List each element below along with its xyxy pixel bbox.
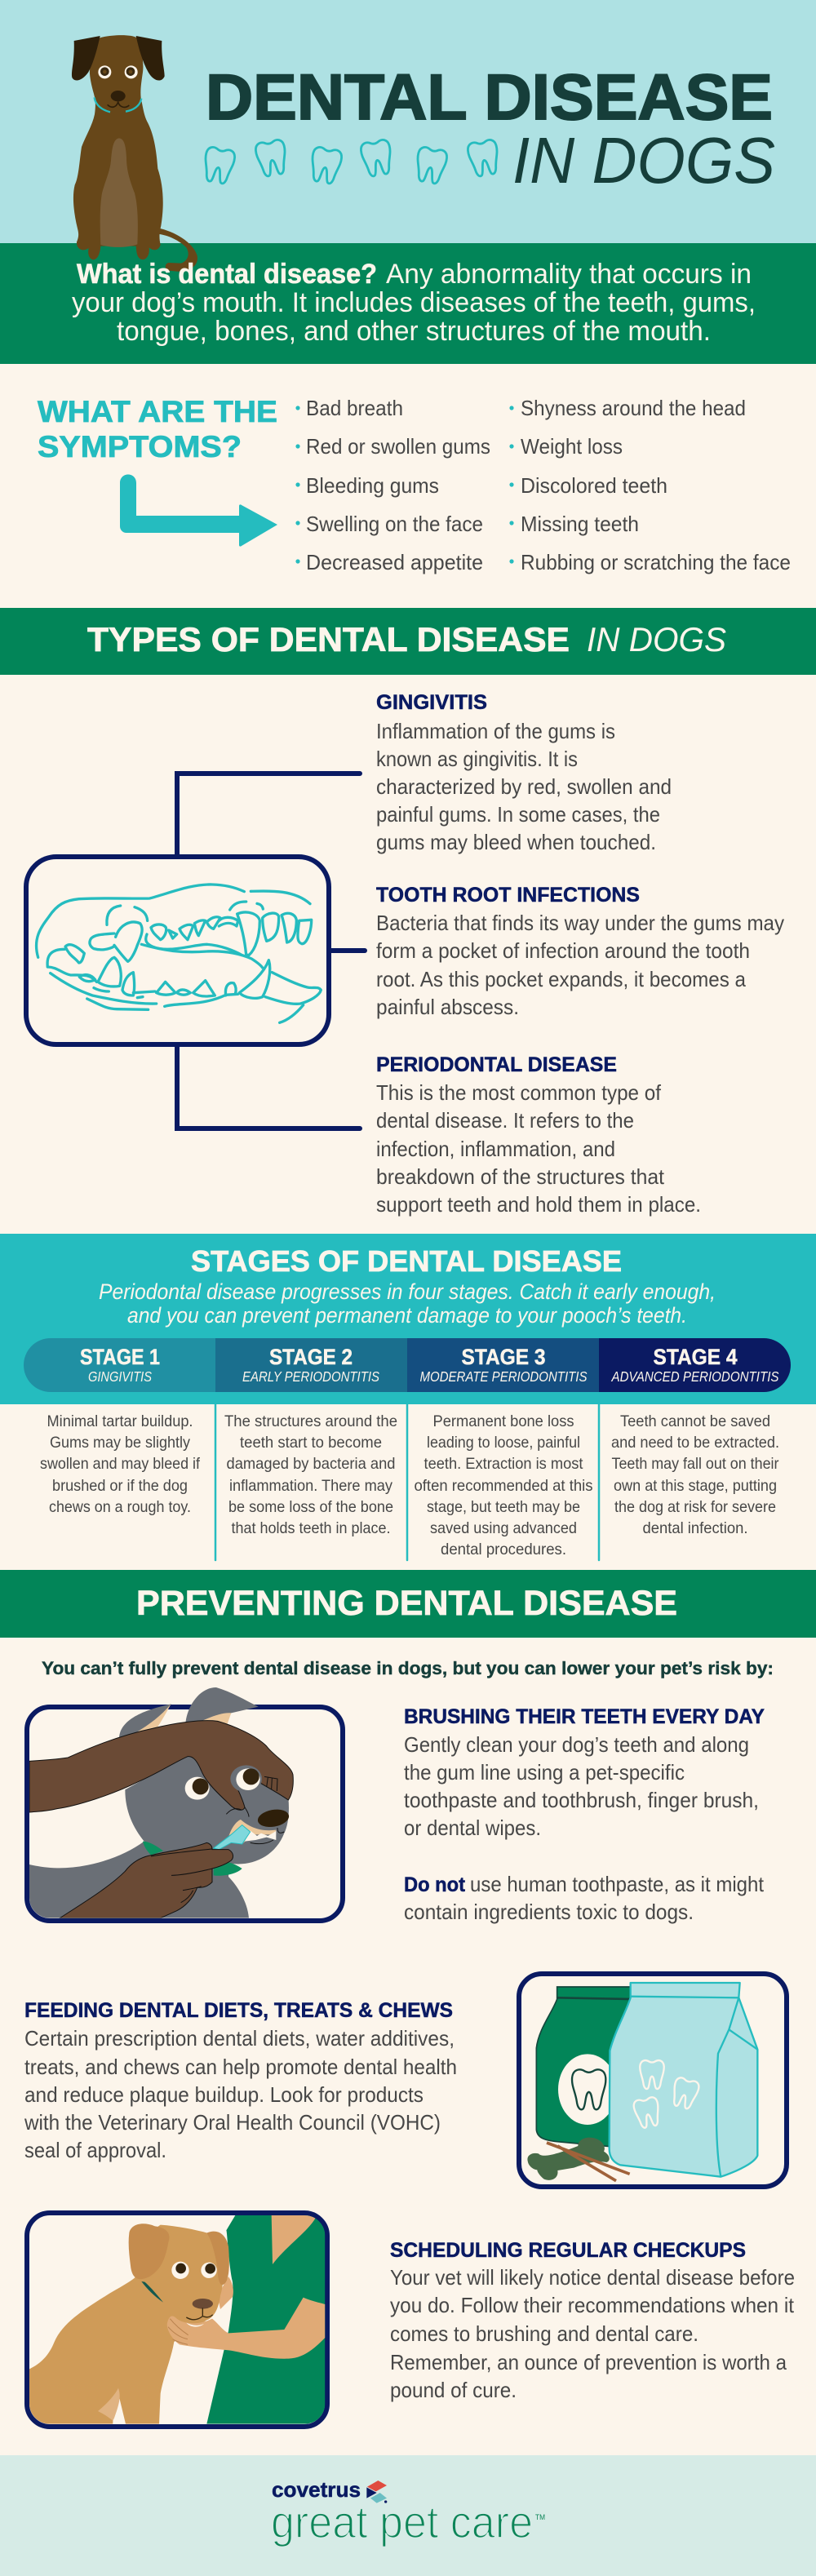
intro text: What is dental disease?: [77, 259, 377, 290]
type: tooth root infections: [376, 884, 784, 1019]
stage 1 description: chews on a rough toy.: [49, 1498, 191, 1516]
type: tooth root infections: Bacteria that finds its way under the gums may: [376, 911, 784, 935]
stage 4 description: Teeth may fall out on their: [612, 1455, 779, 1473]
hand holding brush: [60, 1842, 233, 1918]
symptoms list: Shyness around the head: [521, 396, 746, 420]
stage 1 description: [40, 1412, 201, 1516]
symptoms heading: [38, 395, 277, 463]
type: periodontal disease: breakdown of the structures that: [376, 1164, 665, 1189]
intro text: your dog’s mouth. It includes diseases of the teeth, gums,: [72, 287, 756, 318]
stage 2 description: The structures around the: [224, 1412, 397, 1430]
tip: checkups: Your vet will likely notice dental disease before: [390, 2265, 795, 2290]
icon: covetrus logo: [366, 2481, 387, 2503]
type: gingivitis: [376, 691, 672, 854]
mouth and teeth: [228, 1820, 276, 1844]
stage 3 description: [415, 1412, 593, 1558]
type: gingivitis: painful gums. In some cases, the: [376, 802, 660, 827]
tip: brushing: toothpaste and toothbrush, finger brush,: [404, 1788, 759, 1812]
stage 4 description: dental infection.: [643, 1519, 747, 1537]
type: periodontal disease: [376, 1053, 701, 1217]
stages intro: [99, 1279, 716, 1328]
title: DENTAL DISEASE: [206, 60, 773, 133]
stages intro: and you can prevent permanent damage to your pooch’s teeth.: [127, 1303, 687, 1328]
footer: [0, 2455, 816, 2576]
prevention intro: You can’t fully prevent dental disease in dogs, but you can lower your pet’s risk by:: [42, 1658, 774, 1678]
stage pill bar: [24, 1338, 791, 1392]
symptoms list: Rubbing or scratching the face: [521, 550, 791, 574]
illustration: food bags and treats: [519, 1974, 787, 2187]
stage 3 description: often recommended at this: [415, 1477, 593, 1495]
nose: [258, 1810, 289, 1827]
symptoms list: Decreased appetite: [306, 550, 483, 574]
type: periodontal disease: This is the most common type of: [376, 1080, 662, 1105]
tip: checkups: Remember, an ounce of prevention is worth a: [390, 2350, 787, 2374]
nose and mouth: [111, 91, 126, 101]
symptoms list: Bleeding gums: [306, 473, 439, 498]
types heading band: TYPES OF DENTAL DISEASE: [87, 620, 570, 658]
tip: feeding: and reduce plaque buildup. Look for products: [24, 2082, 424, 2107]
bone treat: [527, 2138, 610, 2180]
symptoms list: [295, 396, 791, 574]
type: tooth root infections: root. As this pocket expands, it becomes a: [376, 967, 746, 991]
vet scrubs: [206, 2215, 325, 2424]
green bag: [536, 1987, 634, 2148]
tip: feeding: [24, 1999, 457, 2162]
dog jaw illustration: [26, 857, 329, 1044]
tip: feeding: treats, and chews can help promote dental health: [24, 2055, 457, 2079]
icon: sitting brown dog: [72, 35, 197, 272]
connector lines: [177, 774, 365, 1128]
tip: brushing: [404, 1705, 765, 1924]
vet arm and hand: [167, 2298, 325, 2359]
tip: checkups: SCHEDULING REGULAR CHECKUPS: [390, 2239, 746, 2262]
tip: checkups: [390, 2239, 795, 2402]
type: gingivitis: Inflammation of the gums is: [376, 719, 615, 743]
stage 3 description: saved using advanced: [430, 1519, 577, 1537]
tip: brushing: BRUSHING THEIR TEETH EVERY DAY: [404, 1705, 765, 1728]
stage 2 description: be some loss of the bone: [228, 1498, 393, 1516]
nose and mouth: [193, 2299, 213, 2309]
chest patch: [100, 138, 138, 247]
title: IN DOGS: [512, 124, 775, 197]
types heading band: IN DOGS: [587, 620, 726, 658]
stage 4 description: and need to be extracted.: [611, 1434, 779, 1452]
stage 4 description: [611, 1412, 779, 1537]
tip: brushing: the gum line using a pet-specific: [404, 1760, 685, 1785]
intro text: tongue, bones, and other structures of the mouth.: [117, 316, 711, 347]
stages intro: Periodontal disease progresses in four stages. Catch it early enough,: [99, 1279, 716, 1304]
symptoms heading: WHAT ARE THE: [38, 395, 277, 428]
stage pill bar: MODERATE PERIODONTITIS: [419, 1368, 588, 1385]
tip: brushing: Gently clean your dog’s teeth and along: [404, 1732, 749, 1757]
icon: row of teeth: [202, 139, 501, 185]
vet neckline: [272, 2215, 317, 2264]
intro band background: [0, 243, 816, 364]
type: gingivitis: known as gingivitis. It is: [376, 747, 578, 771]
tip: brushing: contain ingredients toxic to dogs.: [404, 1900, 694, 1924]
tip: brushing: or dental wipes.: [404, 1816, 541, 1840]
stage pill bar: ADVANCED PERIODONTITIS: [611, 1368, 779, 1385]
preventing heading band: PREVENTING DENTAL DISEASE: [136, 1584, 677, 1623]
type: gingivitis: GINGIVITIS: [376, 691, 487, 714]
stage pill bar: STAGE 4: [653, 1345, 738, 1369]
toothbrush: [214, 1825, 251, 1850]
collar: [95, 97, 141, 112]
stage 2 description: inflammation. There may: [229, 1477, 392, 1495]
symptoms heading: SYMPTOMS?: [38, 430, 242, 463]
tip: brushing: use human toothpaste, as it might: [470, 1872, 765, 1896]
type: periodontal disease: infection, inflammation, and: [376, 1137, 615, 1161]
stage 2 description: damaged by bacteria and: [227, 1455, 395, 1473]
header panel: [0, 0, 816, 364]
type: gingivitis: characterized by red, swollen and: [376, 774, 672, 799]
type: tooth root infections: TOOTH ROOT INFECTIONS: [376, 884, 640, 907]
title: [206, 60, 775, 197]
tip: feeding: Certain prescription dental diets, water additives,: [24, 2026, 455, 2051]
stage 2 description: that holds teeth in place.: [232, 1519, 390, 1537]
symptoms list: Bad breath: [306, 396, 403, 420]
dog ears: [129, 2224, 229, 2285]
dog ears: [119, 1687, 259, 1738]
stage 1 description: Gums may be slightly: [50, 1434, 190, 1452]
intro text: [72, 259, 756, 347]
arrow: [120, 475, 277, 547]
covetrus wordmark: covetrus: [272, 2477, 361, 2502]
vet hand behind neck: [218, 2277, 233, 2309]
tip: feeding: with the Veterinary Oral Health Council (VOHC): [24, 2110, 441, 2135]
types heading band: [0, 608, 816, 675]
stage pill bar: STAGE 2: [269, 1345, 353, 1369]
symptoms list: Red or swollen gums: [306, 434, 490, 459]
stage 1 description: Minimal tartar buildup.: [47, 1412, 193, 1430]
trademark: TM: [535, 2513, 545, 2521]
stage 4 description: Teeth cannot be saved: [620, 1412, 770, 1430]
stage 2 description: teeth start to become: [240, 1434, 382, 1452]
seal with tooth: [558, 2054, 617, 2125]
type: tooth root infections: form a pocket of infection around the tooth: [376, 938, 750, 963]
illustration: brushing dog's teeth: [27, 1687, 343, 1921]
stage pill bar: STAGE 3: [462, 1345, 545, 1369]
type: periodontal disease: dental disease. It refers to the: [376, 1108, 634, 1133]
stage 4 description: own at this stage, putting: [614, 1477, 777, 1495]
symptoms list: Swelling on the face: [306, 512, 483, 536]
tip: checkups: comes to brushing and dental care.: [390, 2321, 698, 2346]
tip: brushing: Do not: [404, 1873, 466, 1896]
light bag: [610, 1983, 757, 2177]
symptoms list: Missing teeth: [521, 512, 639, 536]
stage 3 description: stage, but teeth may be: [427, 1498, 580, 1516]
dog eyes: [171, 2262, 189, 2279]
illustration: vet holding dog: [27, 2213, 327, 2427]
stage pill bar: STAGE 1: [80, 1345, 160, 1369]
stages panel: [0, 1234, 816, 1404]
tip: feeding: seal of approval.: [24, 2138, 166, 2162]
stages heading: STAGES OF DENTAL DISEASE: [191, 1244, 622, 1278]
intro text: Any abnormality that occurs in: [386, 259, 752, 290]
stage 2 description: [224, 1412, 397, 1537]
tip: feeding: FEEDING DENTAL DIETS, TREATS & CHEWS: [24, 1999, 453, 2022]
stage pill bar: EARLY PERIODONTITIS: [242, 1368, 379, 1385]
collar: [143, 1842, 242, 1876]
stage 1 description: brushed or if the dog: [52, 1477, 188, 1495]
stage 4 description: the dog at risk for severe: [614, 1498, 776, 1516]
chew sticks: [547, 2143, 630, 2181]
symptoms list: Discolored teeth: [521, 473, 667, 498]
preventing heading band: [0, 1570, 816, 1638]
stage 3 description: Permanent bone loss: [432, 1412, 574, 1430]
arm and hand over head: [29, 1721, 293, 1812]
stage 3 description: dental procedures.: [441, 1541, 566, 1558]
tip: checkups: you do. Follow their recommendations when it: [390, 2293, 795, 2317]
stage 3 description: leading to loose, painful: [427, 1434, 580, 1452]
white teeth: [632, 2060, 700, 2129]
great pet care wordmark: great pet care: [271, 2496, 533, 2547]
stage 3 description: teeth. Extraction is most: [424, 1455, 583, 1473]
stage pill bar: GINGIVITIS: [88, 1368, 152, 1385]
dog body: [29, 1752, 289, 1918]
symptoms list: Weight loss: [521, 434, 623, 459]
type: gingivitis: gums may bleed when touched.: [376, 830, 656, 854]
collar: [141, 2281, 163, 2303]
dog eyes: [185, 1777, 210, 1800]
tip: checkups: pound of cure.: [390, 2378, 517, 2402]
stage 1 description: swollen and may bleed if: [40, 1455, 201, 1473]
ears: [72, 36, 100, 80]
dog thigh: [98, 2388, 120, 2421]
bullets: [295, 406, 514, 564]
type: periodontal disease: support teeth and hold them in place.: [376, 1192, 701, 1217]
eyes: [98, 65, 111, 78]
dog body and head: [29, 2225, 223, 2424]
type: periodontal disease: PERIODONTAL DISEASE: [376, 1053, 617, 1076]
type: tooth root infections: painful abscess.: [376, 995, 519, 1019]
